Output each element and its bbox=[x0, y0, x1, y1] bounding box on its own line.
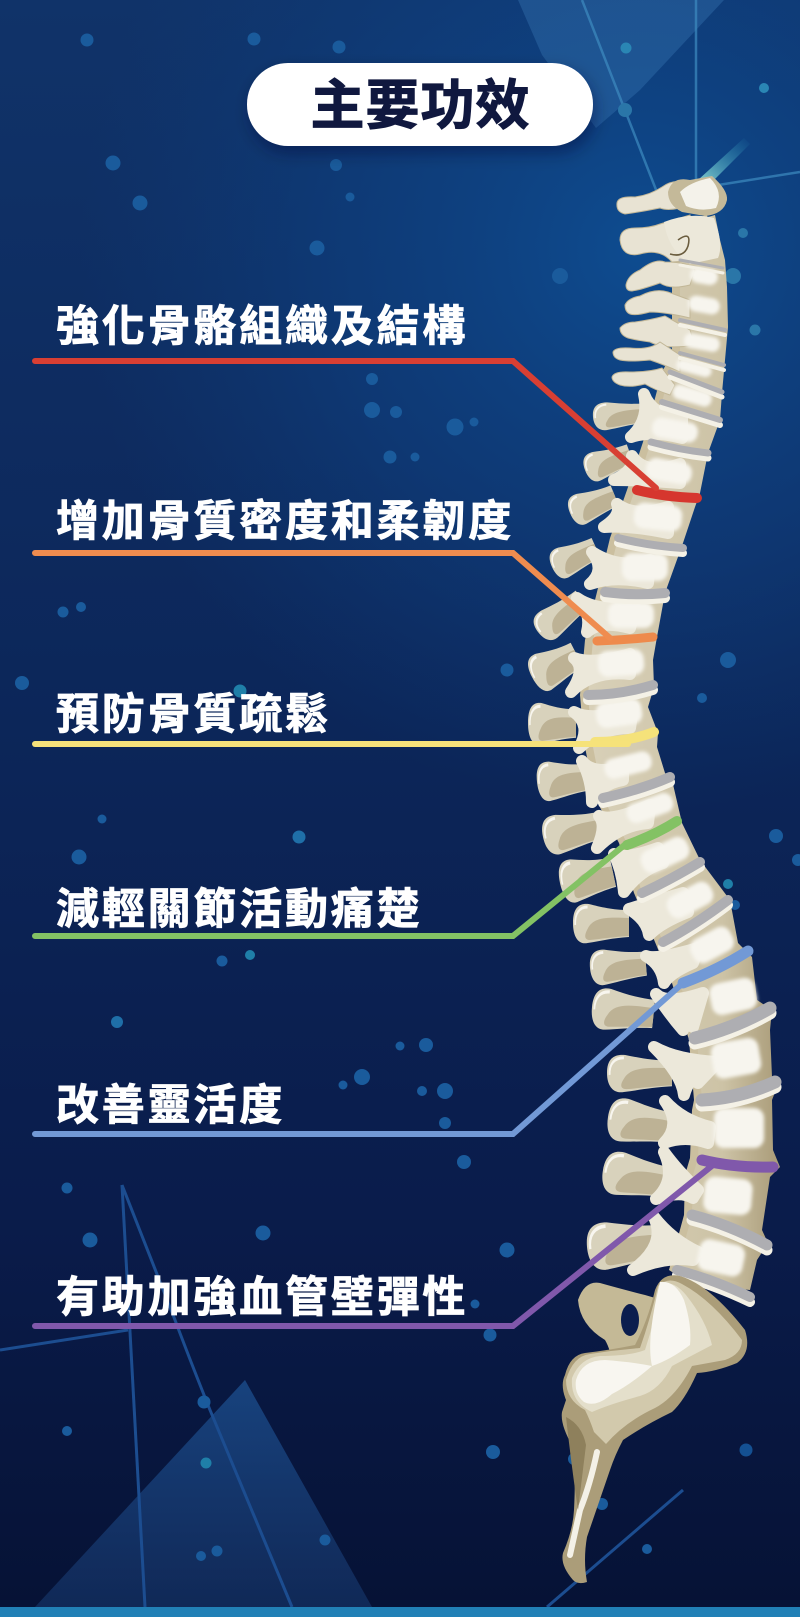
heading 1: 強化骨骼組織及結構 bbox=[56, 303, 468, 351]
callout 5: blue bbox=[35, 951, 748, 1134]
red leader line bbox=[35, 361, 656, 488]
title text: 主要功效 bbox=[310, 76, 530, 136]
sacrum and coccyx bbox=[562, 1275, 747, 1583]
callout 3: yellow bbox=[35, 691, 654, 744]
intervertebral discs bbox=[588, 260, 775, 1297]
title pill bbox=[247, 63, 596, 153]
spine illustration bbox=[523, 176, 780, 1583]
cervical processes bbox=[612, 182, 700, 395]
heading 6: 有助加強血管壁彈性 bbox=[56, 1274, 468, 1322]
orange band on disc bbox=[597, 637, 653, 641]
heading 5: 改善靈活度 bbox=[56, 1082, 285, 1130]
heading 4: 減輕關節活動痛楚 bbox=[56, 886, 422, 934]
green leader line bbox=[35, 843, 627, 936]
red band on disc bbox=[637, 490, 697, 498]
bottom colour bar bbox=[0, 1607, 800, 1617]
vertebral body highlights bbox=[594, 266, 764, 1278]
background: bottom-left triangle and lines bbox=[0, 1185, 683, 1607]
callout 2: orange bbox=[35, 498, 653, 641]
purple band on disc bbox=[702, 1160, 773, 1167]
callout 1: red bbox=[35, 303, 697, 498]
heading 3: 預防骨質疏鬆 bbox=[56, 691, 331, 739]
blue leader line bbox=[35, 983, 683, 1134]
yellow band on disc bbox=[595, 732, 654, 742]
vertebral column bbox=[580, 215, 780, 1290]
orange leader line bbox=[35, 553, 610, 638]
atlas and axis bbox=[664, 176, 727, 264]
callout 6: purple bbox=[35, 1160, 773, 1326]
background: top-right light facets bbox=[518, 0, 800, 200]
blue band on disc bbox=[683, 951, 748, 983]
green band on disc bbox=[627, 821, 677, 845]
yellow leader line bbox=[35, 741, 628, 747]
purple leader line bbox=[35, 1165, 713, 1326]
disc end-plate highlights bbox=[588, 265, 775, 1302]
callout 4: green bbox=[35, 821, 677, 936]
vertebral arches bbox=[571, 394, 718, 1270]
spinous processes bbox=[523, 399, 678, 1271]
heading 2: 增加骨質密度和柔韌度 bbox=[56, 498, 514, 546]
